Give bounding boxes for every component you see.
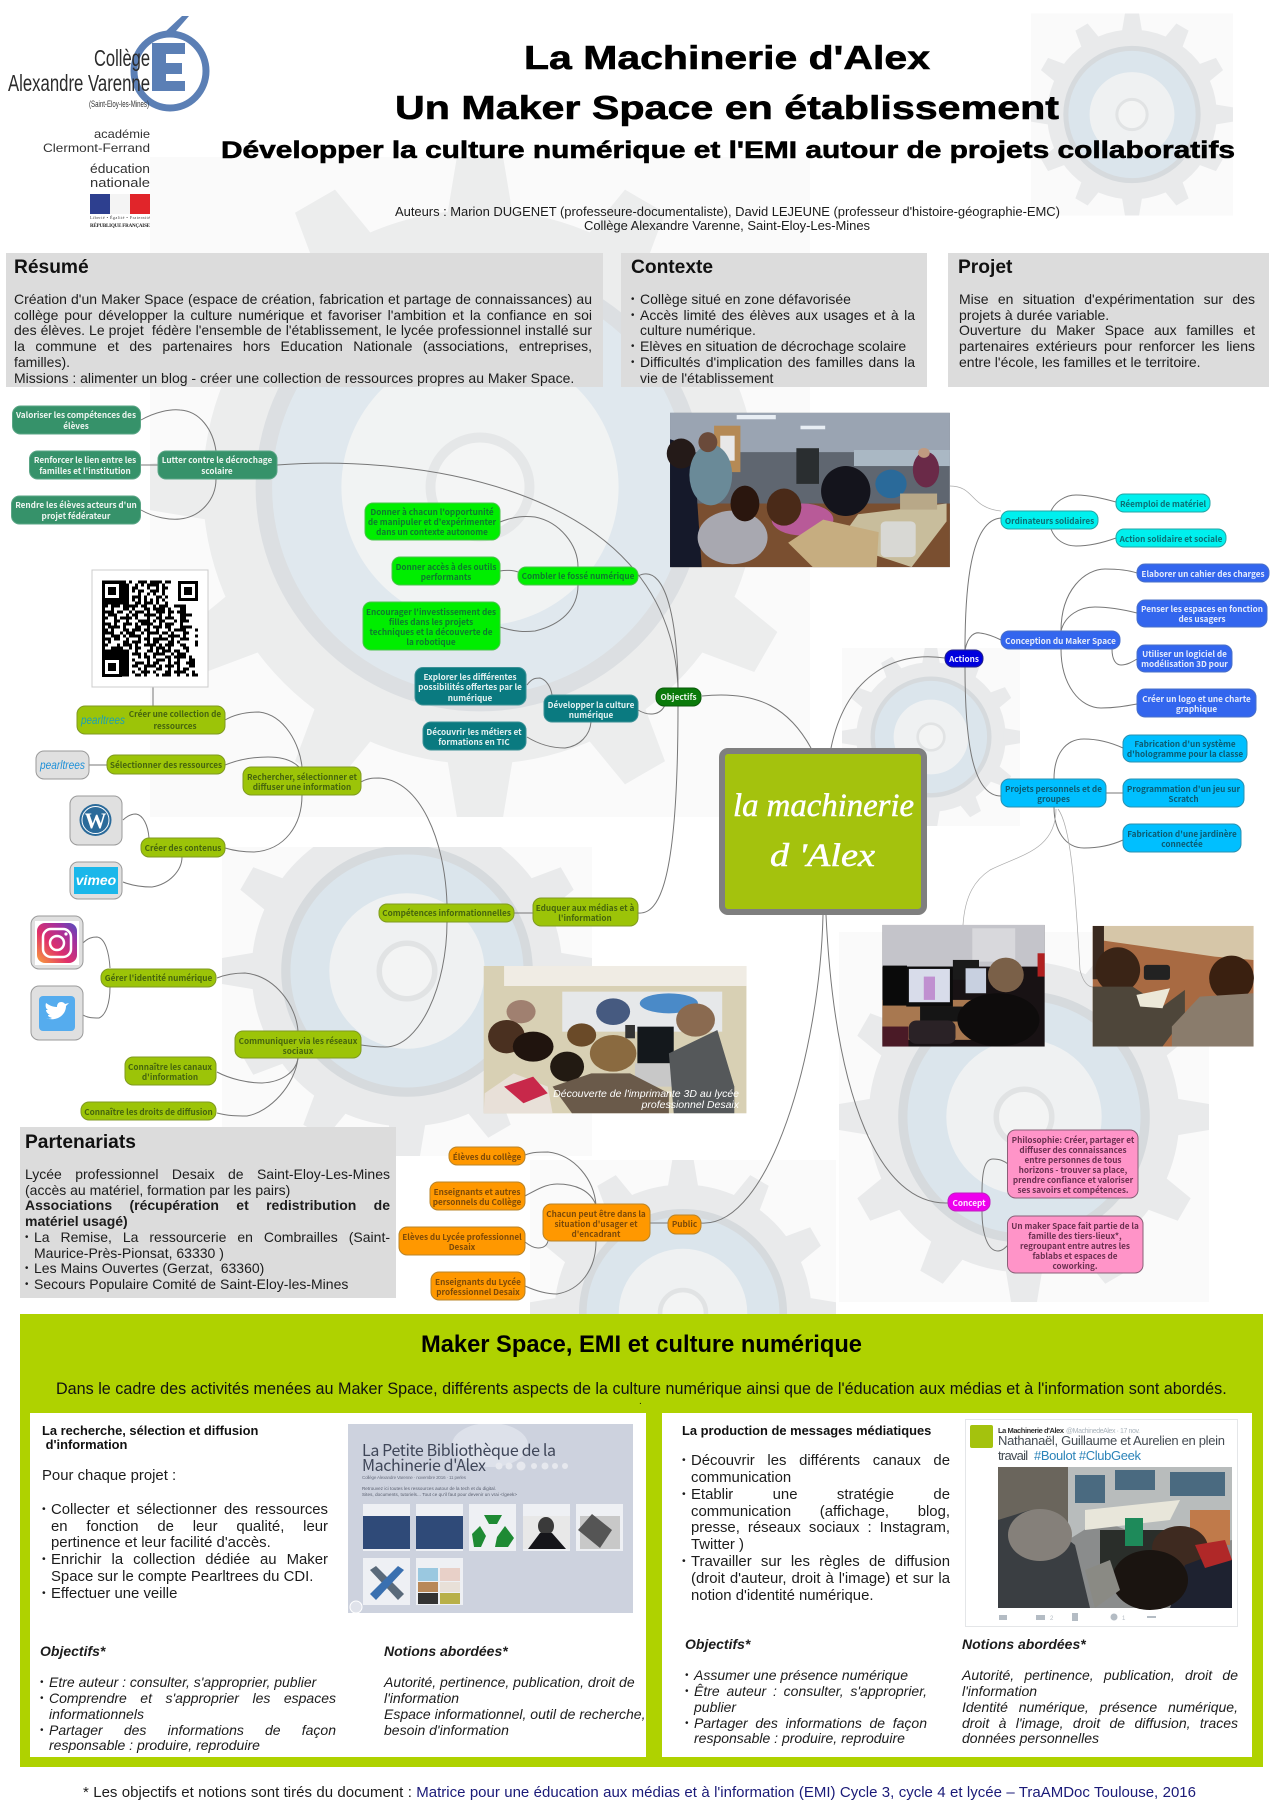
node: créer un logo: graphique: [1176, 703, 1217, 715]
panel: recherche et diffusion: [30, 1413, 646, 1757]
panel: partenariats: [20, 1127, 396, 1298]
logo: Collège Alexandre Varenne: Alexandre Varenne: [8, 70, 150, 96]
node: découvrir: [423, 722, 526, 750]
node: enseignants lycée: [431, 1272, 525, 1300]
icon: instagram: [31, 916, 83, 969]
text block: partenariats: La Remise, La ressourcerie en Combrailles (Saint-: [34, 1229, 390, 1245]
QR code: [92, 570, 208, 687]
text block: objectifs production: responsable : produire, reproduire: [694, 1730, 905, 1746]
node: philosophie: ses savoirs et compétences.: [1017, 1184, 1129, 1196]
node: valoriser: [12, 406, 140, 434]
node: connaître les droits: Connaître les droits de diffusion: [84, 1106, 213, 1118]
node: projets: Projets personnels et de: [1005, 783, 1102, 795]
node: penser: [1137, 600, 1267, 627]
text block: objectifs recherche: responsable : produire, reproduire: [49, 1737, 260, 1753]
node: jardinière: Fabrication d'une jardinère: [1127, 828, 1237, 840]
text block: partenariats: (accès au matériel, formation par les pairs): [25, 1182, 290, 1198]
photo: découverte de l'imprimante 3D: professionnel Desaix: [641, 1099, 740, 1111]
node: concept: [948, 1193, 990, 1211]
node: élèves lycée: Elèves du Lycée professionnel: [402, 1231, 522, 1243]
icon: pearltrees: [36, 751, 89, 779]
node: chacun: situation d'usager et: [554, 1218, 638, 1230]
text block: contexte: Elèves en situation de décrochage scolaire: [640, 338, 906, 354]
text block: objectifs production: publier: [694, 1699, 736, 1715]
node: communiquer: Communiquer via les réseaux: [239, 1035, 358, 1047]
node: chacun: d'encadrant: [572, 1228, 621, 1240]
node: donner accès: performants: [421, 571, 471, 583]
text block: notions production: données personnelles: [962, 1730, 1099, 1746]
node: action solidaire: [1116, 529, 1226, 547]
node: sélectionner: [107, 755, 225, 774]
node: connaître les canaux: [125, 1057, 216, 1085]
node: découvrir: Découvrir les métiers et: [426, 726, 522, 738]
node: réemploi: [1116, 494, 1210, 512]
panel: Maker Space, EMI et culture numérique: .: [639, 1396, 642, 1407]
icon: wordpress: [70, 796, 122, 845]
screenshot: tweet: 2: [1050, 1616, 1054, 1622]
node: un maker space: coworking.: [1052, 1260, 1098, 1272]
text block: partenariats: Maurice-Près-Pionsat, 63330 ): [34, 1245, 224, 1261]
node: chacun: [543, 1204, 650, 1241]
text block: partenariats: Associations (récupération et redistribution de: [25, 1197, 390, 1213]
node: penser: des usagers: [1178, 613, 1226, 625]
text block: projet: Mise en situation d'expérimentation sur des: [959, 291, 1255, 307]
node: actions: Actions: [948, 653, 979, 665]
node: un maker space: regroupant entre autres les: [1020, 1240, 1130, 1252]
node: donner à chacun: [365, 503, 500, 540]
text block: pour chaque projet: [42, 1468, 328, 1602]
logo: Collège Alexandre Varenne: RÉPUBLIQUE FRANÇAISE: [90, 223, 151, 229]
node: créer une collection: ressources: [153, 720, 197, 732]
node: rechercher: Rechercher, sélectionner et: [247, 771, 357, 783]
text block: contexte: culture numérique.: [640, 322, 756, 338]
screenshot: tweet: @MachinedeAlex · 17 nov.: [1066, 1428, 1140, 1435]
node: réemploi: Réemploi de matériel: [1120, 498, 1206, 510]
node: créer une collection: Créer une collection de: [129, 708, 221, 720]
node: éduquer: Eduquer aux médias et à: [536, 902, 634, 914]
screenshot: tweet: La Machinerie d'Alex: [998, 1426, 1065, 1435]
node: utiliser: Utiliser un logiciel de: [1142, 648, 1227, 660]
heading: contexte: Contexte: [631, 257, 713, 278]
node: encourager: techniques et la découverte de: [369, 626, 493, 638]
text block: contexte: Collège situé en zone défavorisée: [640, 291, 851, 307]
text block: partenariats: Lycée professionnel Desaix de Saint-Eloy-Les-Mines: [25, 1166, 390, 1182]
text block: production list: Découvrir les différents canaux de: [691, 1453, 950, 1469]
branch: actions: [945, 494, 1269, 852]
node: donner à chacun: dans un contexte autonome: [376, 526, 488, 538]
node: enseignants collège: personnels du Collège: [433, 1196, 522, 1208]
screenshot: Pearltrees collection: Sites, documents, tutoriels... Tout ce qu'il faut pour devenir un vrai </geek>: [362, 1492, 517, 1497]
text block: résumé: collège pour développer la culture numérique et favoriser l'ambition et la confiance en soi: [14, 307, 592, 323]
node: développer: [544, 695, 638, 722]
mind map node: central, la machinerie d'Alex: d 'Alex: [770, 838, 875, 874]
node: rechercher: diffuser une information: [253, 781, 351, 793]
branch: objectifs, lutter contre le décrochage: [12, 406, 277, 524]
node: philosophie: diffuser des connaissances: [1019, 1144, 1127, 1156]
logo: Collège Alexandre Varenne: Collège: [94, 45, 150, 71]
node: connaître les canaux: d'information: [142, 1071, 198, 1083]
text block: objectifs recherche: [40, 1643, 336, 1753]
node: explorer: [415, 668, 526, 705]
node: lutter: Lutter contre le décrochage: [162, 454, 273, 466]
mind map node: central, la machinerie d'Alex: [722, 751, 924, 912]
node: encourager: Encourager l'investissement des: [366, 606, 496, 618]
node: connaître les droits: [81, 1102, 216, 1120]
logo: Collège Alexandre Varenne: [8, 16, 206, 229]
node: un maker space: fablabs et espaces de: [1032, 1250, 1118, 1262]
branch: public: [399, 1147, 701, 1300]
text block: notions recherche: [383, 1643, 645, 1738]
node: lutter: scolaire: [201, 465, 233, 477]
mind map connectors: [83, 410, 1137, 1294]
text block: production list: [682, 1453, 950, 1604]
text block: notions production: droit à l'image, droit de diffusion, traces: [962, 1714, 1238, 1730]
node: encourager: la robotique: [406, 636, 456, 648]
logo: Collège Alexandre Varenne: académie: [94, 127, 150, 141]
node: scratch: [1123, 779, 1244, 807]
node: enseignants collège: [430, 1182, 525, 1210]
authors: Auteurs : Marion DUGENET (professeure-documentaliste), David LEJEUNE (professeur d'histoire-géographie-EMC): [395, 204, 1060, 219]
node: conception: Conception du Maker Space: [1005, 635, 1116, 647]
node: élaborer: Elaborer un cahier des charges: [1141, 568, 1265, 580]
node: élèves lycée: Desaix: [449, 1241, 476, 1253]
text block: objectifs production: [685, 1636, 927, 1746]
node: rendre: [12, 496, 140, 524]
node: public: [668, 1215, 701, 1234]
node: renforcer: familles et l'institution: [39, 465, 131, 477]
text block: production list: Etablir une stratégie de: [691, 1487, 950, 1503]
node: renforcer: Renforcer le lien entre les: [34, 454, 136, 466]
node: combler: Combler le fossé numérique: [522, 570, 635, 582]
text block: production list: communication (affichage, blog,: [691, 1504, 950, 1520]
node: donner à chacun: de manipuler et d'expérimenter: [368, 516, 497, 528]
node: enseignants collège: Enseignants et autres: [434, 1186, 520, 1198]
node: rendre: projet fédérateur: [42, 510, 111, 522]
heading: section title: Maker Space, EMI et culture numérique: [421, 1332, 862, 1358]
title: Développer la culture numérique et l'EMI autour de projets collaboratifs: [221, 137, 1235, 164]
text block: objectifs production: Objectifs*: [685, 1636, 750, 1652]
text block: résumé: des élèves. Le projet fédère l'ensemble de l'établissement, le lycée professionnel installé sur: [14, 322, 592, 338]
node: développer: numérique: [569, 709, 613, 721]
node: lutter: [158, 451, 277, 479]
node: chacun: Chacun peut être dans la: [546, 1208, 646, 1220]
text block: résumé: Missions : alimenter un blog - créer une collection de ressources propres au Maker Space.: [14, 370, 574, 386]
panel: contexte: [621, 253, 927, 387]
text block: notions production: [961, 1636, 1238, 1746]
text block: notions production: Identité numérique, présence numérique,: [962, 1699, 1238, 1715]
node: combler: [518, 567, 638, 585]
text block: projet: partenaires extérieurs pour renforcer les liens: [959, 338, 1255, 354]
node: valoriser: Valoriser les compétences des: [15, 409, 136, 421]
text block: contexte: vie de l'établissement: [640, 370, 773, 386]
text block: notions recherche: besoin d'information: [384, 1722, 509, 1738]
node: scratch: Scratch: [1168, 793, 1199, 805]
text block: résumé: Création d'un Maker Space (espace de création, fabrication et partage de connaissances) au: [14, 291, 592, 307]
photo: découverte de l'imprimante 3D: [484, 966, 746, 1113]
text block: objectifs production: Partager des informations de façon: [694, 1714, 927, 1730]
node: un maker space: Un maker Space fait partie de la: [1011, 1220, 1139, 1232]
text block: objectifs recherche: informationnels: [49, 1706, 144, 1722]
heading: résumé: Résumé: [14, 257, 89, 278]
node: donner à chacun: Donner à chacun l'opportunité: [370, 506, 494, 518]
node: valoriser: élèves: [63, 420, 89, 432]
screenshot: tweet: Nathanaël, Guillaume et Aurelien en plein: [998, 1433, 1225, 1448]
node: élaborer: [1137, 564, 1269, 582]
text block: pour chaque projet: pertinence et leur facilité d'accès.: [51, 1535, 271, 1551]
node: projets: [1001, 779, 1106, 807]
node: jardinière: [1123, 824, 1241, 852]
logo: Collège Alexandre Varenne: éducation: [90, 161, 150, 176]
node: action solidaire: Action solidaire et sociale: [1119, 533, 1223, 545]
heading: partenariats: Partenariats: [25, 1132, 136, 1153]
panel: résumé: [6, 253, 603, 387]
node: créer un logo: Créer un logo et une charte: [1142, 693, 1251, 705]
node: hologramme: Fabrication d'un système: [1134, 738, 1236, 750]
panel: projet: [948, 253, 1269, 387]
branch: développer la culture numérique: [415, 668, 638, 750]
screenshot: Pearltrees collection: La Petite Bibliothèque de la: [362, 1437, 556, 1461]
node: éduquer: [533, 898, 638, 926]
screenshot: Pearltrees collection: Machinerie d'Alex: [362, 1452, 486, 1476]
node: donner accès: [392, 557, 500, 585]
node: donner accès: Donner accès à des outils: [396, 561, 496, 573]
text block: objectifs production: Assumer une présence numérique: [694, 1667, 908, 1683]
screenshot: tweet: #Boulot #ClubGeek: [1034, 1448, 1142, 1463]
node: gérer: Gérer l'identité numérique: [105, 972, 213, 984]
heading: projet: Projet: [958, 257, 1012, 278]
node: philosophie: entre personnes de tous: [1024, 1154, 1122, 1166]
text block: partenariats: Secours Populaire Comité de Saint-Eloy-les-Mines: [34, 1276, 348, 1292]
node: jardinière: connectée: [1161, 838, 1203, 850]
node: concept: Concept: [952, 1197, 986, 1209]
node: communiquer: [235, 1031, 361, 1058]
node: utiliser: modélisation 3D pour: [1141, 658, 1228, 670]
node: enseignants lycée: professionnel Desaix: [436, 1286, 520, 1298]
node: sélectionner: Sélectionner des ressources: [110, 759, 222, 771]
node: un maker space: famille des tiers-lieux*,: [1028, 1230, 1122, 1242]
panel: production de messages médiatiques: [662, 1413, 1252, 1757]
text block: notions production: l'information: [962, 1683, 1037, 1699]
node: créer un logo: [1137, 689, 1256, 717]
node: philosophie: [1008, 1130, 1138, 1198]
text block: objectifs production: Être auteur : consulter, s'approprier,: [694, 1683, 927, 1699]
text block: production list: Travailler sur les règles de diffusion: [691, 1554, 950, 1570]
node: créer une collection: [77, 706, 225, 734]
branch: combler le fossé numérique: [363, 503, 638, 650]
branch: éduquer aux médias, rechercher: [31, 706, 638, 1120]
node: compétences: [379, 904, 514, 922]
node: rechercher: [243, 767, 361, 795]
text block: résumé: la commune et des partenaires hors Education Nationale (associations, entreprises,: [14, 338, 592, 354]
text block: pour chaque projet: en fonction de leur qualité, leur: [51, 1519, 328, 1535]
text block: contexte: [631, 291, 916, 386]
text block: pour chaque projet: Effectuer une veille: [51, 1586, 177, 1602]
node: élèves du collège: Élèves du collège: [453, 1150, 521, 1163]
text block: production list: communication: [691, 1470, 791, 1486]
node: objectifs: [656, 688, 701, 706]
authors: [395, 204, 1060, 233]
node: hologramme: d'hologramme pour la classe: [1127, 748, 1243, 760]
screenshot: tweet: [965, 1419, 1238, 1627]
photo: atelier au CDI: [667, 413, 950, 567]
panel: Maker Space, EMI et culture numérique: [20, 1314, 1263, 1767]
node: utiliser: [1137, 645, 1232, 672]
node: objectifs: Objectifs: [660, 691, 697, 703]
text block: notions recherche: l'information: [384, 1690, 459, 1706]
node: conception: [1001, 631, 1120, 649]
text block: production list: presse, réseaux sociaux : Instagram,: [691, 1520, 950, 1536]
text block: objectifs recherche: Comprendre et s'approprier les espaces: [49, 1690, 336, 1706]
text block: résumé: familles).: [14, 354, 70, 370]
text block: section intro: Dans le cadre des activités menées au Maker Space, différents aspects de la culture numérique ainsi que de l'éducation aux médias et à l'information sont abordés.: [56, 1380, 1227, 1398]
mind map node: central, la machinerie d'Alex: la machinerie: [733, 788, 914, 824]
node: développer: Développer la culture: [548, 699, 635, 711]
node: encourager: filles dans les projets: [389, 616, 473, 628]
node: créer des contenus: Créer des contenus: [145, 842, 221, 854]
node: explorer: numérique: [448, 692, 492, 704]
node: projets: groupes: [1037, 793, 1070, 805]
text block: objectifs recherche: Partager des informations de façon: [49, 1722, 336, 1738]
text block: notions recherche: Notions abordées*: [384, 1643, 508, 1659]
screenshot: tweet: travail: [998, 1448, 1031, 1463]
node: philosophie: prendre confiance et valoriser: [1013, 1174, 1134, 1186]
text block: projet: Ouverture du Maker Space aux familles et: [959, 322, 1255, 338]
footnote: * Les objectifs et notions sont tirés du document : Matrice pour une éducation aux médias et à l'information (EMI) Cycle 3, cycle 4 et lycée – TraAMDoc Toulouse, 2016: [83, 1784, 1196, 1801]
text block: contexte: Accès limité des élèves aux usages et à la: [640, 307, 915, 323]
node: découvrir: formations en TIC: [438, 736, 510, 748]
photo: fabrication: [1093, 926, 1254, 1047]
text block: projet: entre l'école, les familles et le territoire.: [959, 354, 1201, 370]
heading: production: La production de messages médiatiques: [682, 1423, 931, 1438]
text block: production list: Twitter ): [691, 1537, 744, 1553]
text block: notions recherche: Espace informationnel, outil de recherche,: [384, 1706, 645, 1722]
text block: projet: projets à durée variable.: [959, 307, 1109, 323]
screenshot: tweet: 1: [1122, 1616, 1126, 1622]
node: connaître les canaux: Connaître les canaux: [128, 1061, 212, 1073]
node: renforcer: [30, 451, 140, 479]
logo: Collège Alexandre Varenne: nationale: [90, 175, 150, 190]
photo: programmation sur ordinateur: [882, 925, 1045, 1047]
text block: pour chaque projet: Pour chaque projet :: [42, 1468, 176, 1484]
node: un maker space: [1008, 1216, 1143, 1273]
node: rendre: Rendre les élèves acteurs d'un: [15, 499, 137, 511]
node: explorer: Explorer les différentes: [423, 671, 517, 683]
logo: Collège Alexandre Varenne: Clermont-Ferrand: [43, 141, 150, 155]
node: hologramme: [1123, 735, 1247, 762]
text block: notions production: Autorité, pertinence, publication, droit de: [962, 1667, 1238, 1683]
node: public: Public: [672, 1218, 698, 1230]
node: ordinateurs solidaires: Ordinateurs solidaires: [1005, 515, 1094, 527]
node: encourager: [363, 602, 500, 650]
text block: notions production: Notions abordées*: [962, 1636, 1086, 1652]
background gears: [150, 14, 1233, 1466]
title: La Machinerie d'Alex: [524, 39, 931, 76]
heading: recherche: La recherche, sélection et diffusion d'information: [42, 1423, 258, 1452]
logo: Collège Alexandre Varenne: Liberté • Égalité • Fraternité: [90, 215, 150, 220]
node: gérer: [101, 969, 216, 987]
node: actions: [945, 650, 983, 667]
icon: blue É: [134, 16, 206, 108]
logo: Collège Alexandre Varenne: (Saint-Eloy-les-Mines): [89, 99, 149, 109]
node: compétences: Compétences informationnelles: [382, 907, 511, 919]
node: philosophie: Philosophie: Créer, partager et: [1012, 1134, 1135, 1146]
text block: objectifs recherche: Etre auteur : consulter, s'approprier, publier: [49, 1674, 316, 1690]
text block: contexte: Difficultés d'implication des familles dans la: [640, 354, 915, 370]
node: élèves lycée: [399, 1227, 525, 1255]
authors: Collège Alexandre Varenne, Saint-Eloy-Les-Mines: [584, 218, 870, 233]
text block: pour chaque projet: Collecter et sélectionner des ressources: [51, 1502, 328, 1518]
title: Un Maker Space en établissement: [395, 89, 1059, 126]
icon: vimeo: vimeo: [76, 872, 117, 888]
node: explorer: possibilités offertes par le: [418, 681, 522, 693]
text block: partenariats: matériel usagé): [25, 1213, 128, 1229]
icon: twitter: [31, 986, 83, 1040]
node: créer une collection: pearltrees: [80, 713, 125, 727]
text block: résumé: [14, 291, 592, 386]
text block: projet: [959, 291, 1255, 370]
screenshot: Pearltrees collection: Retrouvez ici toutes les ressources autour de la tech et du digital.: [362, 1486, 496, 1491]
text block: partenariats: [25, 1166, 390, 1292]
node: élèves du collège: [449, 1147, 525, 1165]
text block: objectifs recherche: Objectifs*: [40, 1643, 105, 1659]
node: enseignants lycée: Enseignants du Lycée: [435, 1276, 521, 1288]
text block: production list: (droit d'auteur, droit à l'image) et sur la: [691, 1571, 950, 1587]
node: créer des contenus: [141, 838, 225, 857]
icon: French flag: [90, 194, 150, 214]
node: scratch: Programmation d'un jeu sur: [1127, 783, 1241, 795]
screenshot: Pearltrees collection: Collège Alexandre Varenne · novembre 2016 · 11 perles: [362, 1475, 467, 1480]
photo: découverte de l'imprimante 3D: Découverte de l'imprimante 3D au lycée: [553, 1088, 739, 1100]
text block: partenariats: Les Mains Ouvertes (Gerzat, 63360): [34, 1260, 264, 1276]
screenshot: Pearltrees collection: [348, 1424, 633, 1613]
node: philosophie: horizons - trouver sa place,: [1019, 1164, 1128, 1176]
text block: notions recherche: Autorité, pertinence, publication, droit de: [384, 1674, 635, 1690]
icon: vimeo: [70, 862, 122, 899]
branch: concept: [948, 1130, 1143, 1273]
node: éduquer: l'information: [558, 912, 612, 924]
icon: pearltrees: pearltrees: [39, 758, 85, 772]
node: ordinateurs solidaires: [1001, 511, 1098, 529]
text block: production list: notion d'identité numérique.: [691, 1588, 873, 1604]
text block: pour chaque projet: Space sur le compte Pearltrees du CDI.: [51, 1569, 313, 1585]
node: penser: Penser les espaces en fonction: [1141, 603, 1263, 615]
text block: pour chaque projet: Enrichir la collection dédiée au Maker: [51, 1552, 328, 1568]
title: [221, 39, 1235, 164]
node: communiquer: sociaux: [283, 1045, 314, 1057]
icon: wordpress: W: [84, 808, 106, 833]
